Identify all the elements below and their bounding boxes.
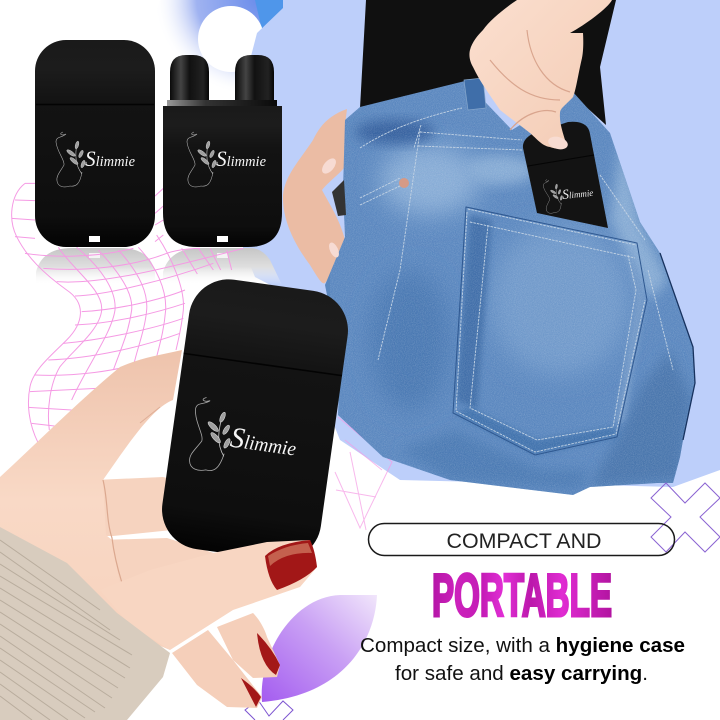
open case: caps xyxy=(170,55,274,100)
background: pale blue panel xyxy=(243,0,720,487)
pill heading xyxy=(368,524,674,556)
lower fingers xyxy=(217,613,280,678)
nails xyxy=(265,540,317,590)
right cross outline xyxy=(651,483,720,552)
product: open case with caps xyxy=(163,55,282,247)
pocket slit shadow beside left hand xyxy=(332,180,346,216)
large case held in hand xyxy=(157,274,353,566)
fingernails on left hand xyxy=(319,156,341,259)
background: blue splash and white circle xyxy=(154,0,310,100)
thumb xyxy=(100,540,317,650)
open case: logo: Slimmie xyxy=(216,146,266,171)
holding hand back fingers xyxy=(95,477,220,590)
small case in pocket: Slimmie xyxy=(561,184,594,202)
index finger and palm xyxy=(0,350,182,650)
body text: for safe and easy carrying. xyxy=(395,663,648,685)
right hand pulling case xyxy=(469,0,612,151)
large case: logo xyxy=(187,396,302,483)
open case: logo xyxy=(187,132,266,187)
closed case: logo: Slimmie xyxy=(85,146,135,171)
knit sleeve xyxy=(0,527,170,720)
jeans: rivet xyxy=(399,178,409,188)
jeans: stitching xyxy=(360,108,673,452)
product: closed case xyxy=(35,40,155,247)
jeans: pocket outline xyxy=(453,207,647,455)
body text xyxy=(360,635,685,685)
holding hand front xyxy=(0,350,317,708)
jeans: right side seam xyxy=(660,253,695,440)
black shirt xyxy=(360,0,616,125)
small case in pocket xyxy=(523,122,608,228)
lower cross outline xyxy=(245,700,293,720)
background: pink warped grid xyxy=(12,183,392,530)
product reflections xyxy=(36,248,282,285)
large case: logo: Slimmie xyxy=(228,422,299,463)
jeans xyxy=(325,78,700,500)
closed case: logo xyxy=(56,132,135,187)
jeans: belt loop xyxy=(464,78,486,110)
purple blob xyxy=(262,595,377,702)
hand: fingernail xyxy=(547,135,569,151)
body text: Compact size, with a hygiene case xyxy=(360,635,685,657)
left hand on hip xyxy=(283,109,347,283)
pill heading: COMPACT AND xyxy=(446,530,602,553)
